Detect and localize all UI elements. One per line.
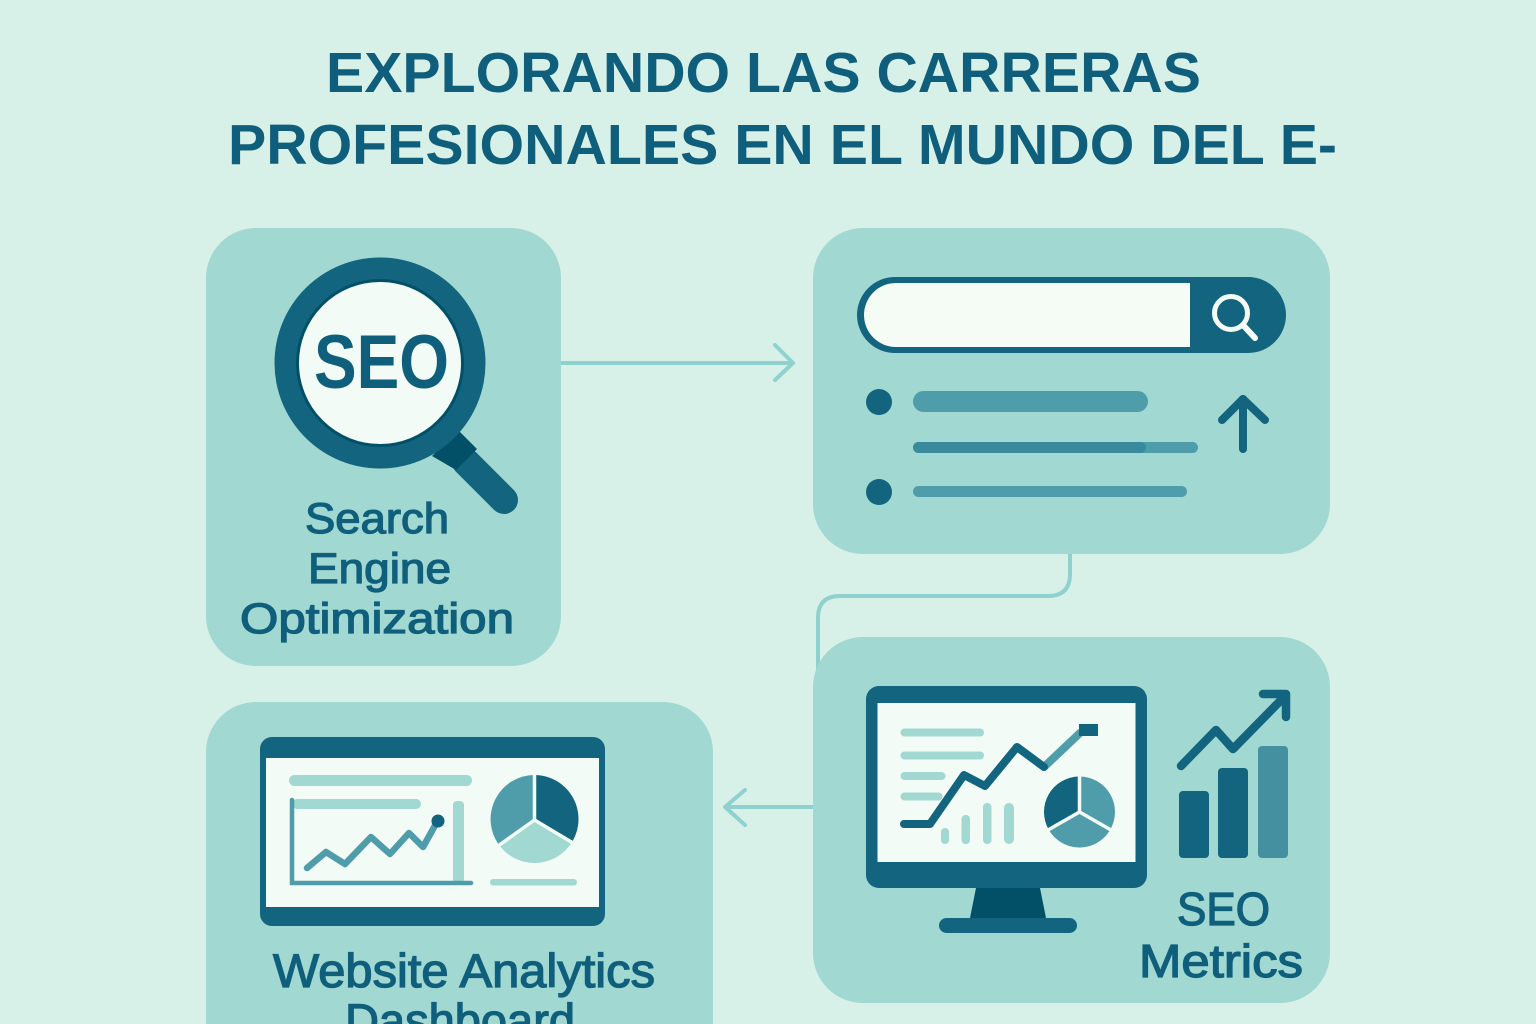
panel label: Optimization [240,595,514,643]
panel background [206,228,561,666]
icon: search magnifier [1214,296,1255,338]
search result row 1 [866,389,1148,415]
panel: website analytics dashboard [206,702,713,1024]
panel: search engine optimization [206,228,561,666]
panel label: Website Analytics [273,944,655,997]
title: EXPLORANDO LAS CARRERAS [326,41,1201,105]
panel label: SEO [1177,883,1270,935]
panel: search results [813,228,1330,554]
panel label [273,944,655,1024]
icon: desktop monitor with charts [866,686,1147,933]
panel background [813,228,1330,554]
title [228,41,1337,177]
panel: SEO metrics [813,637,1330,1003]
icon: SEO magnifying glass [274,258,504,500]
chart: rising bars with arrow [1179,694,1288,858]
search result row 3 [866,479,1187,505]
connector: search results panel to metrics panel [818,554,1070,670]
panel label [1139,883,1303,987]
panel label: Search [305,495,449,543]
icon: ranking up arrow [1222,399,1265,449]
icon: SEO magnifying glass: SEO [314,320,449,405]
icon: analytics dashboard screen [260,737,605,926]
arrow: metrics panel to analytics dashboard panel [725,790,813,825]
panel label [240,495,514,643]
panel background [206,702,713,1024]
arrow: SEO panel to search results panel [561,345,793,380]
panel background [813,637,1330,1003]
search bar [857,277,1286,353]
panel label: Metrics [1139,935,1303,987]
title: PROFESIONALES EN EL MUNDO DEL E- [228,113,1337,177]
panel label: Engine [308,545,451,593]
search result row 2 [913,442,1198,453]
